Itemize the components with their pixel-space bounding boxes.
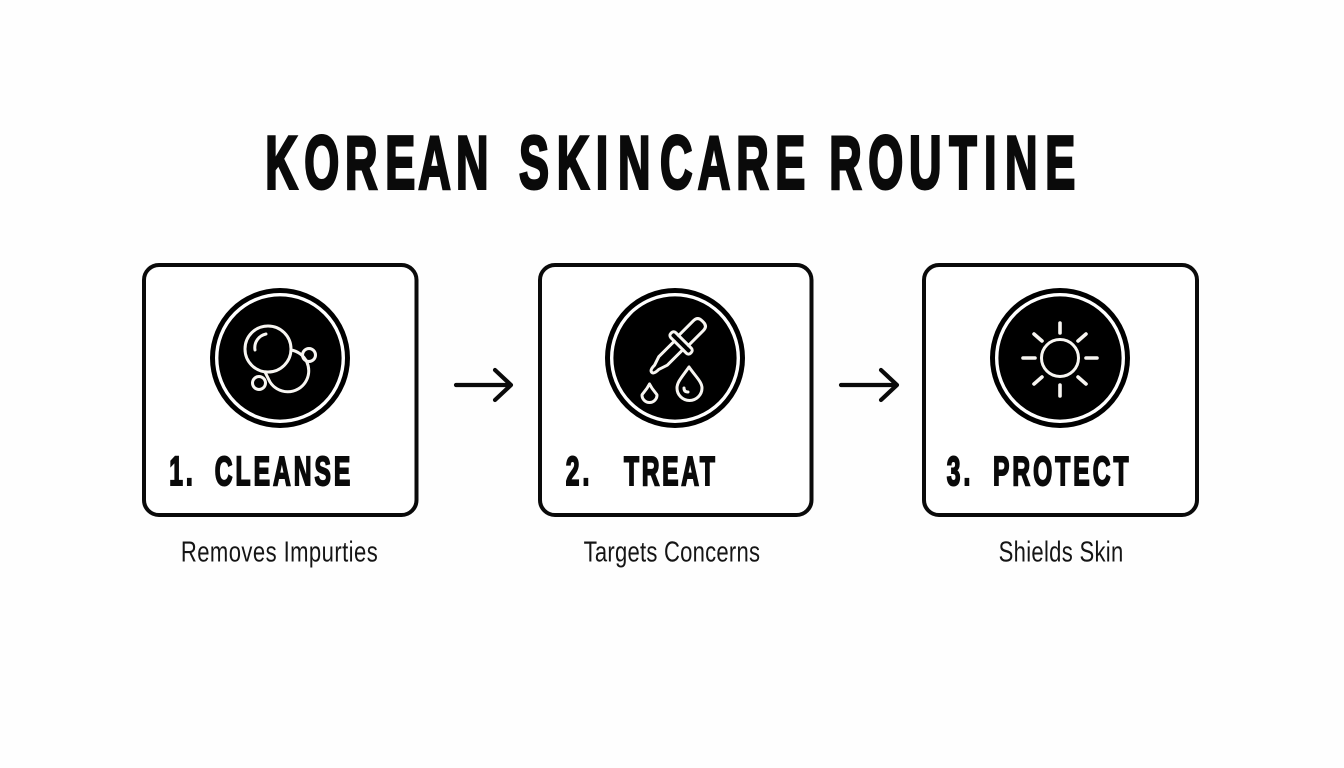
- panel: cleanse: [144, 265, 416, 515]
- icon: bubbles: [210, 288, 350, 428]
- icon: dropper: [605, 288, 745, 428]
- step label: cleanse: 1.: [169, 449, 196, 495]
- step label: treat: TREAT: [624, 449, 718, 495]
- caption: treat: Targets Concerns: [584, 537, 760, 568]
- step label: protect: 3.: [947, 449, 973, 495]
- caption: cleanse: Removes Impurties: [181, 537, 378, 568]
- title: KOREAN SKINCARE ROUTINE: [265, 122, 1075, 205]
- caption: protect: Shields Skin: [999, 537, 1123, 568]
- step label: cleanse: CLEANSE: [215, 449, 353, 495]
- step label: protect: PROTECT: [993, 449, 1131, 495]
- panel: treat: [540, 265, 812, 515]
- arrow: cleanse to treat: [456, 370, 511, 400]
- step label: treat: 2.: [566, 449, 592, 495]
- arrow: treat to protect: [841, 370, 897, 400]
- icon: sun: [990, 288, 1130, 428]
- panel: protect: [924, 265, 1197, 515]
